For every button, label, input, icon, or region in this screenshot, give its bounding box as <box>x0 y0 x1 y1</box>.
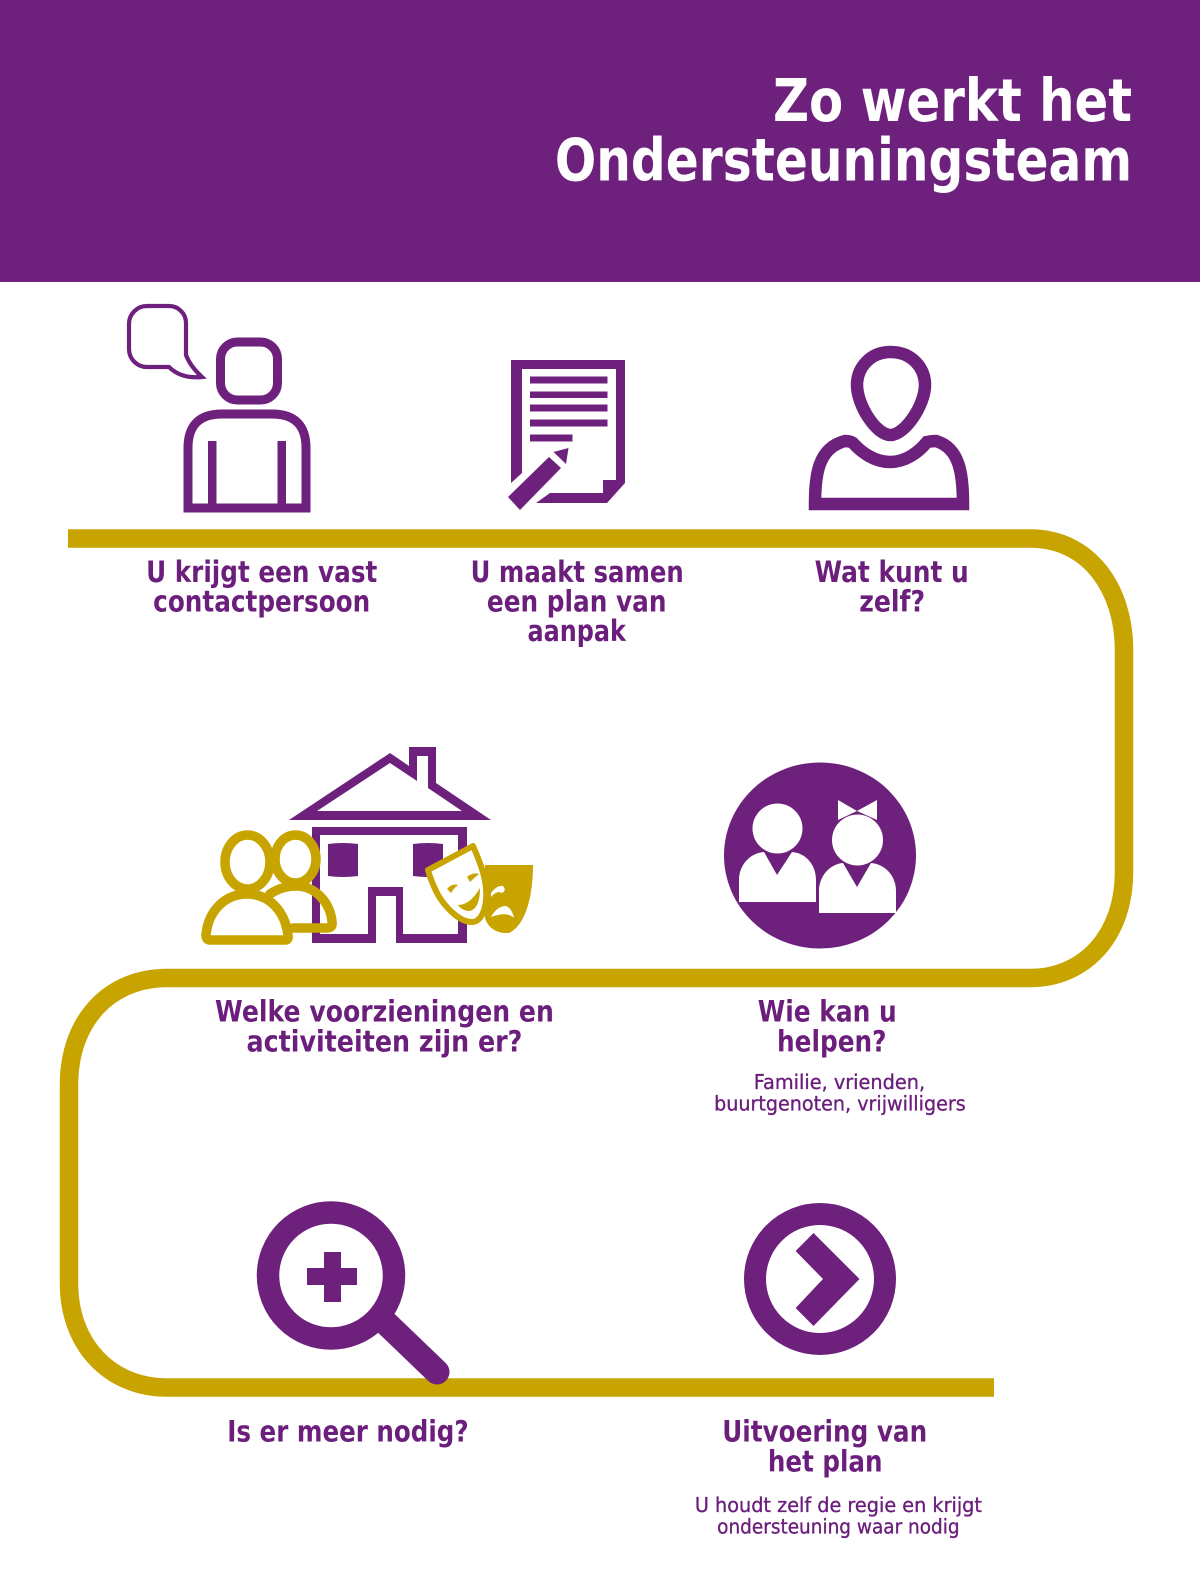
people <box>206 835 332 940</box>
text: family and friends: Familie, vrienden, <box>754 1070 925 1094</box>
label: who can help <box>758 995 897 1058</box>
label: self: Wat kunt u <box>815 555 969 589</box>
label: plan: een plan van <box>487 585 666 619</box>
text: family and friends <box>714 1070 966 1115</box>
icon: chevron in circle <box>755 1214 885 1344</box>
house body <box>312 827 467 943</box>
header banner <box>0 0 1200 282</box>
label: plan: aanpak <box>527 614 627 648</box>
text: family and friends: buurtgenoten, vrijwilligers <box>714 1091 966 1115</box>
gold route line <box>68 538 1124 1388</box>
house roof <box>289 747 491 820</box>
title: Zo werkt het <box>773 66 1132 135</box>
icon: document with pencil <box>508 360 625 510</box>
icon: magnifying glass <box>268 1212 437 1372</box>
masks <box>485 865 533 933</box>
icon: two people in circle <box>724 762 916 948</box>
label: facilities and activities: Welke voorzieningen en <box>215 995 554 1029</box>
label: self <box>815 555 969 619</box>
label: contact person <box>146 555 378 619</box>
label: is more needed: Is er meer nodig? <box>227 1414 469 1448</box>
label: plan <box>471 555 684 648</box>
label: execution of the plan: Uitvoering van <box>722 1414 927 1448</box>
icon: house with people and theatre masks <box>206 747 533 943</box>
icon: person outline <box>815 352 963 504</box>
text: own control and support: U houdt zelf de regie en krijgt <box>695 1493 982 1517</box>
label: facilities and activities: activiteiten zijn er? <box>246 1024 522 1058</box>
icon: contact person with speech bubble <box>129 306 306 508</box>
label: self: zelf? <box>859 585 925 619</box>
label: execution of the plan <box>722 1414 927 1478</box>
label: who can help: helpen? <box>777 1024 887 1058</box>
label: execution of the plan: het plan <box>768 1444 883 1478</box>
label: plan: U maakt samen <box>471 555 684 589</box>
label: contact person: contactpersoon <box>153 585 370 619</box>
label: contact person: U krijgt een vast <box>146 555 378 589</box>
title <box>555 66 1132 195</box>
text: own control and support: ondersteuning waar nodig <box>717 1514 960 1538</box>
label: facilities and activities <box>215 995 554 1058</box>
label: who can help: Wie kan u <box>758 995 897 1029</box>
text: own control and support <box>695 1493 982 1538</box>
